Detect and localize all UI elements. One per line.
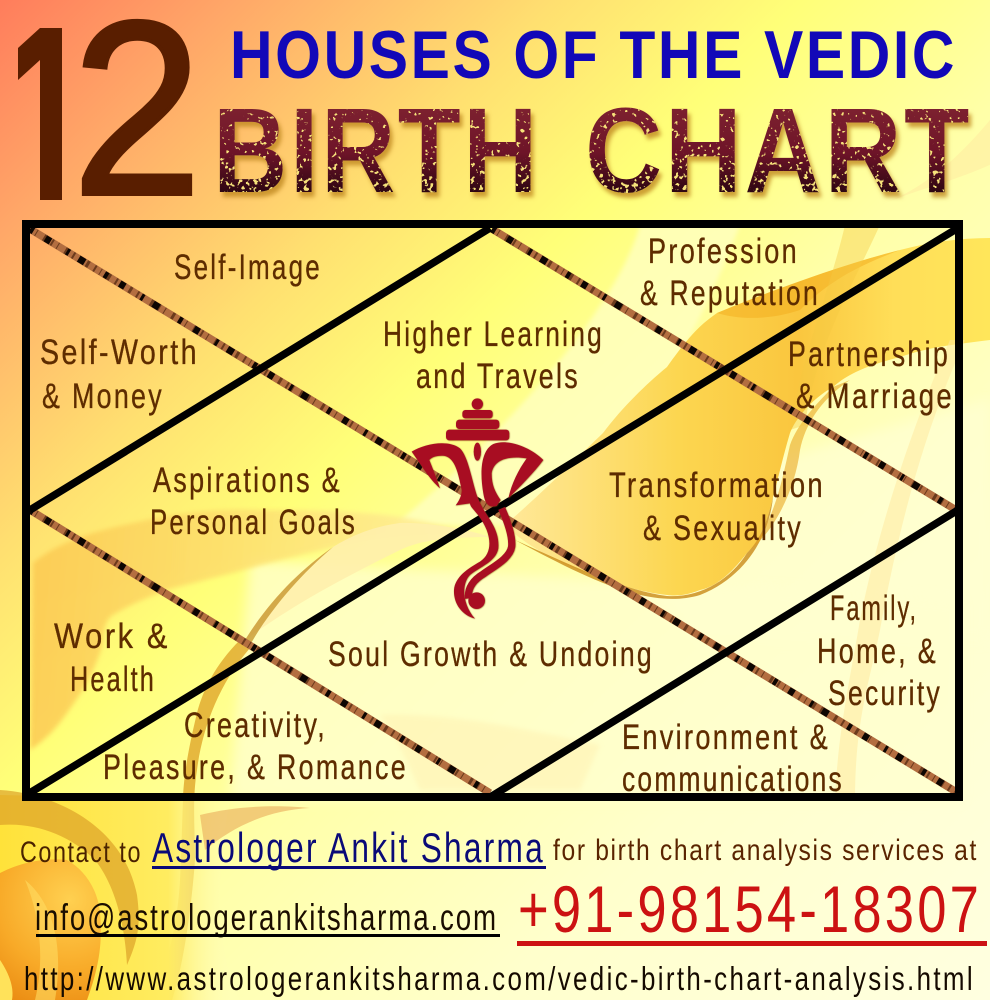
house labels: communications — [622, 760, 844, 799]
contact line: Contact to — [20, 836, 142, 869]
house labels: Soul Growth & Undoing — [328, 635, 654, 674]
house labels: & Reputation — [640, 274, 820, 313]
icon: ganesha — [412, 398, 543, 619]
house labels: Higher Learning — [383, 315, 604, 354]
contact line — [20, 824, 978, 871]
house labels: Self-Worth — [40, 333, 199, 372]
email: info@astrologerankitsharma.com — [35, 897, 498, 938]
house labels: Home, & — [817, 632, 938, 671]
house labels: Family, — [830, 589, 918, 628]
birth chart diagram — [26, 224, 959, 797]
house labels: Work & — [54, 617, 170, 656]
astrologer name: Astrologer Ankit Sharma — [152, 824, 545, 871]
house labels: Self-Image — [174, 248, 322, 287]
house labels: Pleasure, & Romance — [103, 748, 408, 787]
heading: birth chart: BIRTH — [213, 82, 540, 218]
black diagonal lines — [28, 228, 958, 796]
house labels: & Sexuality — [643, 509, 803, 548]
house labels: Security — [828, 674, 942, 713]
chart frame — [26, 224, 959, 797]
house labels: Health — [70, 660, 156, 699]
house labels: and Travels — [416, 357, 580, 396]
heading: birth chart — [213, 82, 972, 218]
house labels: & Money — [42, 377, 164, 416]
house labels: Transformation — [609, 466, 825, 505]
title number 12 — [18, 18, 192, 200]
house labels: Aspirations & — [153, 461, 342, 500]
textured diagonal lines — [30, 229, 958, 793]
house labels: Environment & — [622, 718, 830, 757]
house labels: Creativity, — [184, 706, 327, 745]
house labels: Profession — [648, 232, 799, 271]
house labels — [40, 232, 954, 799]
house labels: Personal Goals — [150, 503, 357, 542]
